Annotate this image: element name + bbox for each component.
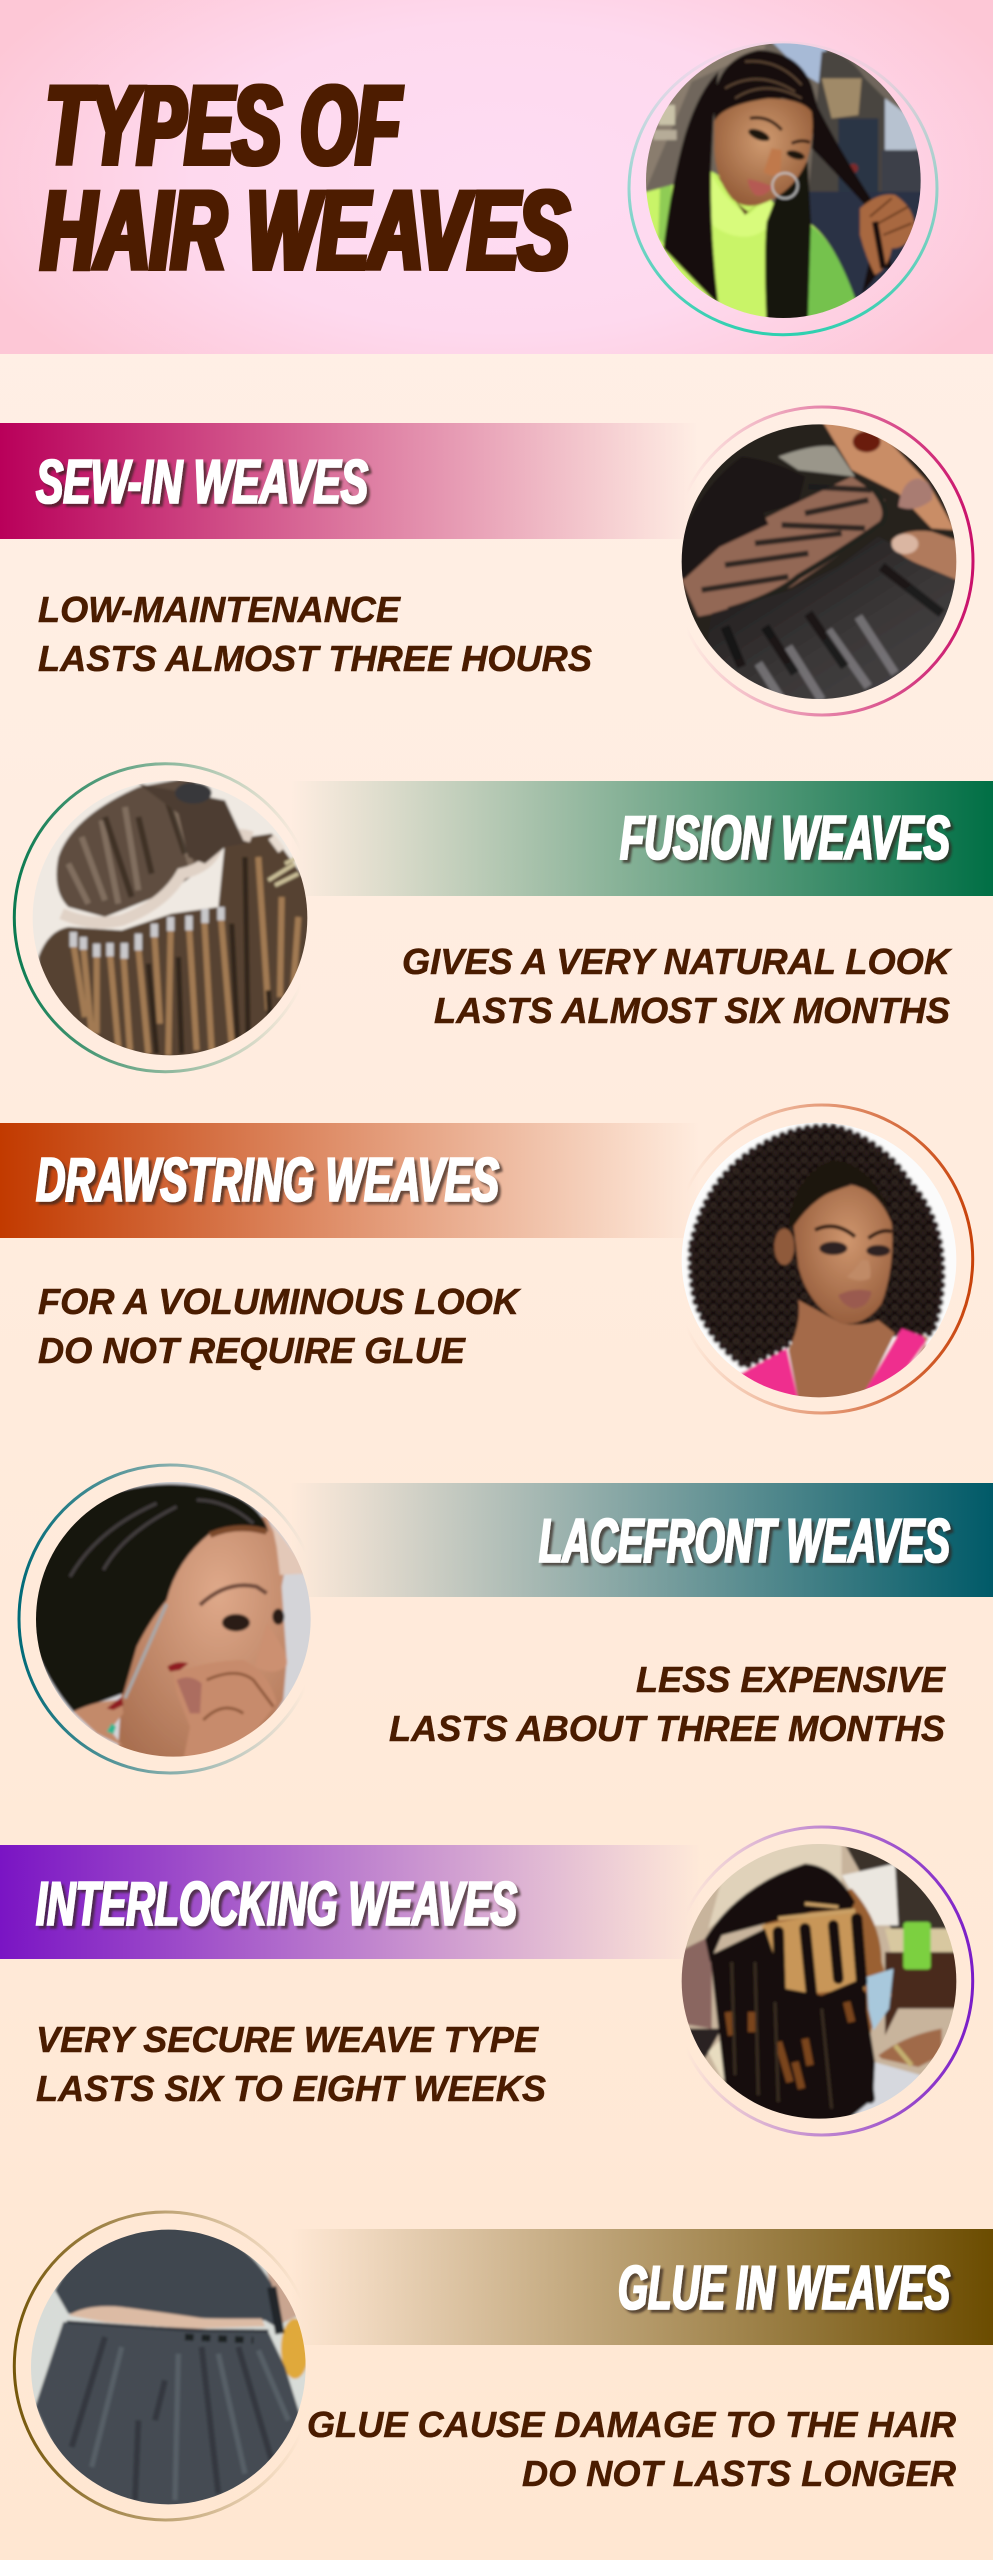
text: drawstring details: DO NOT REQUIRE GLUE [38, 1330, 466, 1371]
heading: sew-in: SEW-IN WEAVES [36, 448, 368, 517]
text: fusion details [402, 941, 953, 1031]
text: lacefront details: LASTS ABOUT THREE MONTHS [389, 1708, 945, 1749]
header photo: woman with box braids [628, 25, 938, 335]
panel: sew-in weaves [0, 407, 973, 715]
photo: fusion weave [14, 764, 318, 1072]
title: HAIR WEAVES [41, 168, 569, 293]
text: lacefront details [389, 1659, 946, 1749]
title [41, 63, 569, 293]
panel: fusion weaves [14, 764, 993, 1072]
panel: header [0, 0, 993, 354]
text: interlocking details: VERY SECURE WEAVE TYPE [36, 2019, 539, 2060]
heading: interlocking: INTERLOCKING WEAVES [36, 1870, 517, 1939]
band: interlocking [0, 1845, 700, 1959]
title: TYPES OF [46, 63, 402, 188]
photo: lacefront application [19, 1465, 323, 1773]
text: drawstring details [38, 1281, 522, 1371]
text: drawstring details: FOR A VOLUMINOUS LOOK [38, 1281, 522, 1322]
photo: sew-in weave [671, 407, 973, 715]
panel: drawstring weaves [0, 1105, 973, 1413]
band: lacefront [290, 1483, 993, 1597]
text: lacefront details: LESS EXPENSIVE [636, 1659, 946, 1700]
text: sew-in details: LOW-MAINTENANCE [38, 589, 401, 630]
photo: drawstring ponytail [671, 1105, 973, 1413]
band: fusion [290, 781, 993, 896]
band: glue in [290, 2229, 993, 2345]
band: sew-in [0, 423, 700, 539]
text: glue in details: GLUE CAUSE DAMAGE TO THE HAIR [307, 2404, 956, 2445]
text: fusion details: LASTS ALMOST SIX MONTHS [434, 990, 950, 1031]
text: glue in details: DO NOT LASTS LONGER [522, 2453, 956, 2494]
text: sew-in details [38, 589, 592, 679]
text: fusion details: GIVES A VERY NATURAL LOOK [402, 941, 953, 982]
panel: interlocking weaves [0, 1827, 973, 2135]
text: interlocking details [36, 2019, 546, 2109]
photo: glue in weave [14, 2212, 318, 2520]
band: drawstring [0, 1123, 700, 1238]
text: glue in details [307, 2404, 956, 2494]
heading: drawstring: DRAWSTRING WEAVES [36, 1146, 499, 1215]
panel: lacefront weaves [19, 1465, 993, 1773]
panel: glue in weaves [14, 2212, 993, 2520]
text: sew-in details: LASTS ALMOST THREE HOURS [38, 638, 592, 679]
text: interlocking details: LASTS SIX TO EIGHT WEEKS [36, 2068, 546, 2109]
photo: interlocking locs [671, 1827, 973, 2135]
